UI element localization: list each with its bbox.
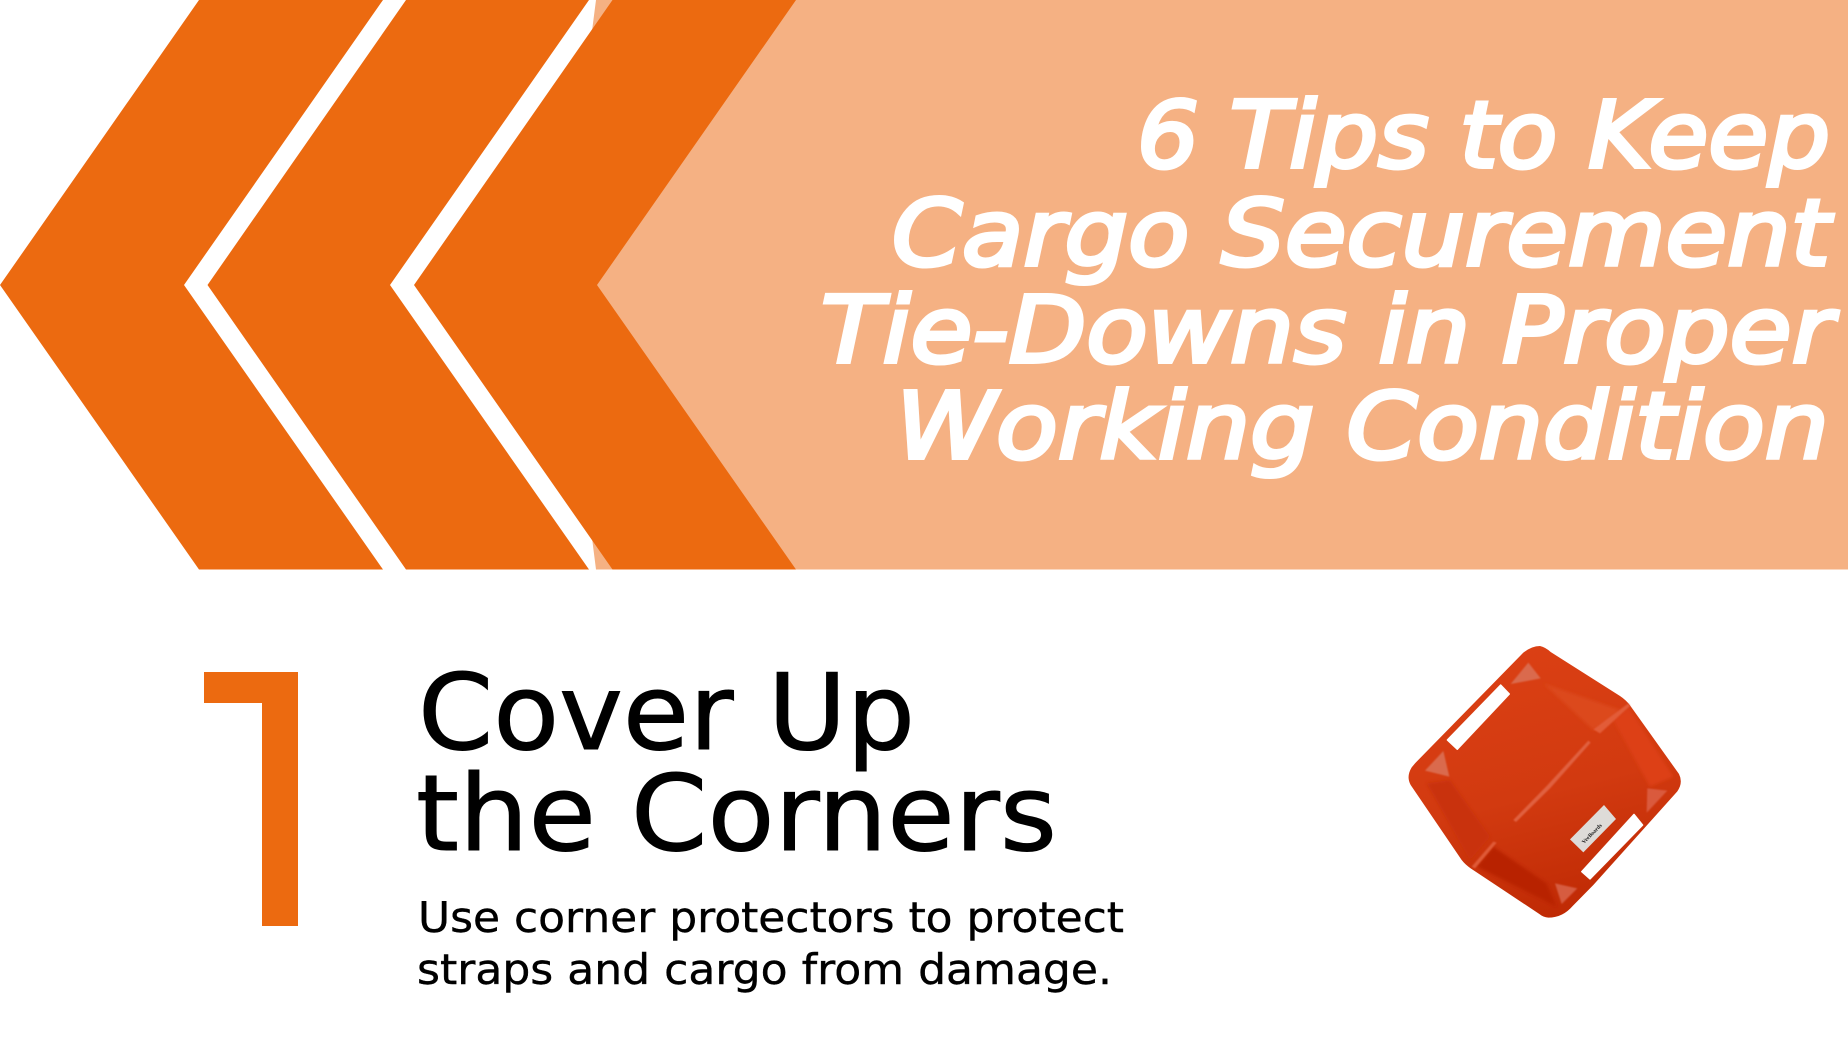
chevron 1 <box>0 0 383 570</box>
upper-right wing highlight <box>1543 683 1620 730</box>
chevron 3 <box>414 0 796 570</box>
title: 6 Tips to Keep <box>1137 82 1830 189</box>
heading: cover up the corners: the Corners <box>416 753 1057 875</box>
slot: upper-left <box>1447 685 1509 749</box>
title <box>821 82 1839 480</box>
corner facet: right <box>1647 788 1667 813</box>
body text: straps and cargo from damage. <box>417 945 1112 994</box>
lower-left wing shadow <box>1477 847 1557 907</box>
icon: orange corner protector <box>1409 646 1681 918</box>
body text: Use corner protectors to protect <box>418 893 1124 942</box>
centre fold highlight <box>1513 741 1591 822</box>
product label <box>1570 805 1616 852</box>
heading: cover up the corners: Cover Up <box>418 652 915 774</box>
body text <box>417 893 1124 994</box>
header band <box>0 0 1848 570</box>
number 1 <box>204 672 298 926</box>
product label: VeeBoards <box>1581 822 1604 845</box>
title: Tie-Downs in Proper <box>821 277 1839 384</box>
corner facet: bottom <box>1555 883 1577 904</box>
title: Cargo Securement <box>892 180 1833 287</box>
title: Working Condition <box>896 373 1829 480</box>
ridge crease upper-right <box>1593 703 1630 733</box>
light peach banner <box>592 0 1848 570</box>
corner facet: left <box>1425 751 1449 777</box>
heading: cover up the corners <box>416 652 1057 875</box>
ridge crease lower-left <box>1472 842 1497 868</box>
corner facet: top <box>1511 663 1541 684</box>
slot: lower-right <box>1582 814 1643 879</box>
chevron 2 <box>208 0 589 570</box>
